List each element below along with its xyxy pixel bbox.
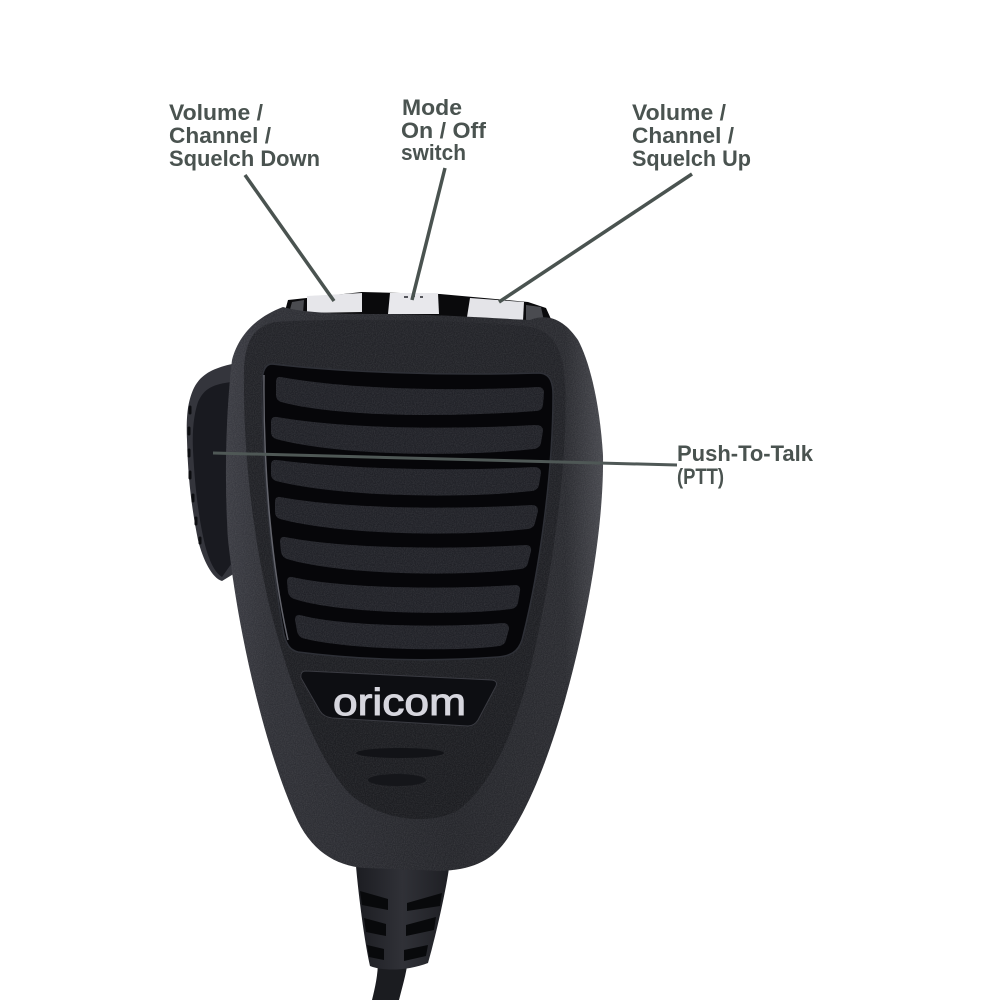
callout line: push-to-talk <box>213 453 677 465</box>
label: mode on off switch: On / Off <box>401 118 487 143</box>
front plate <box>244 320 565 819</box>
grille highlight <box>264 375 288 640</box>
icon: top button row <box>282 292 556 330</box>
logo text: oricom <box>333 682 466 724</box>
label: volume channel squelch down: Volume / <box>169 100 263 125</box>
label: push-to-talk: Push-To-Talk <box>677 441 814 466</box>
label: mode on off switch: Mode <box>402 95 462 120</box>
grille slats <box>271 377 544 649</box>
callout line: volume up <box>499 174 692 302</box>
label: mode on off switch: switch <box>401 140 466 165</box>
lower microphone holes <box>356 748 444 786</box>
logo badge <box>301 671 496 726</box>
label: volume channel squelch down: Channel / <box>169 123 271 148</box>
label: volume channel squelch up: Squelch Up <box>632 146 751 171</box>
speaker grille recess <box>262 364 553 660</box>
icon: microphone body <box>226 307 603 871</box>
label: volume channel squelch up: Channel / <box>632 123 734 148</box>
label: volume channel squelch up: Volume / <box>632 100 726 125</box>
callout line: volume down <box>245 175 334 301</box>
callout line: mode switch <box>412 168 445 300</box>
icon: microphone cable and strain relief <box>356 866 449 1000</box>
label: push-to-talk: (PTT) <box>677 464 724 489</box>
icon: push-to-talk side button <box>187 364 240 581</box>
label: volume channel squelch down: Squelch Down <box>169 146 320 171</box>
